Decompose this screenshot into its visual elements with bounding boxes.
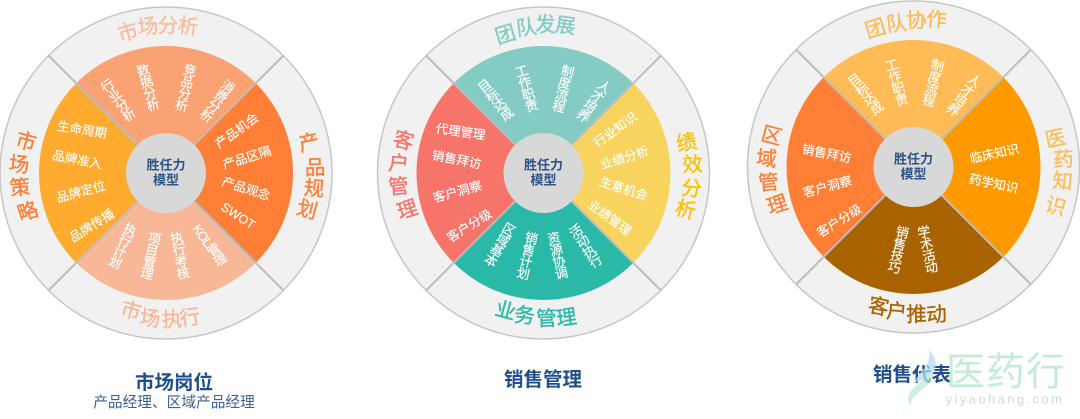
center disc: 胜任力模型: 模型 bbox=[900, 166, 927, 182]
title: 市场策略: 略 bbox=[15, 198, 42, 226]
panel: 医药知识 wedge: 药学知识 bbox=[968, 171, 1020, 196]
title: 业务管理: 务 bbox=[513, 303, 536, 329]
title: 区域管理 bbox=[755, 122, 791, 219]
title: 医药知识 bbox=[1042, 126, 1074, 221]
panel: 区域管理 wedge: 客户分级 bbox=[814, 201, 865, 240]
wheel: 市场岗位 bbox=[0, 7, 332, 339]
panel: 客户推动 wedge bbox=[824, 167, 1003, 294]
panel: 业务管理 wedge bbox=[454, 173, 633, 300]
caption: 销售代表: 销售代表 bbox=[873, 364, 951, 386]
title: 团队发展: 展 bbox=[554, 13, 577, 39]
center disc: 胜任力模型: 模型 bbox=[153, 172, 179, 188]
panel: 市场执行 wedge: 执行考核 bbox=[167, 230, 191, 281]
title: 客户管理: 理 bbox=[394, 196, 421, 224]
title: 团队协作 bbox=[862, 8, 948, 43]
center disc: 胜任力模型 bbox=[874, 127, 954, 207]
wheel: 销售代表 bbox=[748, 1, 1080, 333]
panel: 团队协作 wedge: 工作职责 bbox=[882, 57, 910, 109]
panel: 团队协作 wedge: 人才培养 bbox=[942, 70, 984, 120]
title: 产品规划: 划 bbox=[294, 196, 320, 224]
title: 产品规划: 规 bbox=[303, 177, 325, 201]
center disc: 胜任力模型: 胜任力 bbox=[524, 158, 563, 172]
panel: 医药知识 wedge bbox=[914, 77, 1040, 257]
title: 团队协作: 协 bbox=[906, 9, 927, 33]
title: 团队协作: 作 bbox=[925, 8, 948, 32]
center disc: 胜任力模型 bbox=[126, 133, 206, 213]
title: 产品规划 bbox=[294, 130, 326, 224]
watermark: 医药行 logo bbox=[908, 350, 1066, 406]
title: 客户推动: 户 bbox=[885, 300, 908, 324]
title: 区域管理: 区 bbox=[759, 122, 784, 150]
panel: 市场执行 wedge: 执行计划 bbox=[104, 220, 139, 271]
title: 医药知识: 医 bbox=[1043, 126, 1068, 152]
title: 团队发展: 队 bbox=[515, 15, 538, 41]
panel: 市场执行 wedge bbox=[76, 173, 256, 300]
title: 市场分析 bbox=[115, 14, 200, 47]
panel: 团队协作 wedge bbox=[824, 40, 1003, 167]
title: 区域管理: 域 bbox=[755, 147, 778, 171]
panel: 市场策略 wedge: 品牌定位 bbox=[55, 178, 107, 205]
panel: 绩效分析 wedge: 行业知识 bbox=[591, 110, 640, 150]
title: 客户管理: 客 bbox=[391, 127, 416, 155]
title: 市场执行: 执 bbox=[161, 308, 183, 332]
title: 团队协作: 队 bbox=[885, 11, 908, 37]
panel: 医药知识 wedge: 临床知识 bbox=[969, 142, 1020, 166]
watermark url: yiyaohang.com bbox=[946, 392, 1064, 406]
center disc: 胜任力模型: 胜任力 bbox=[146, 158, 186, 172]
title: 市场分析: 析 bbox=[176, 14, 200, 40]
title: 业务管理: 业 bbox=[493, 297, 518, 325]
panel: 客户管理 wedge: 代理管理 bbox=[435, 121, 487, 142]
panel: 绩效分析 wedge bbox=[544, 83, 670, 263]
panel: 市场策略 wedge: 品牌准入 bbox=[51, 147, 104, 172]
title: 市场策略: 场 bbox=[8, 153, 30, 177]
title: 团队发展 bbox=[492, 13, 577, 49]
panel: 团队发展 wedge: 目标达成 bbox=[474, 76, 517, 125]
title: 市场策略 bbox=[8, 128, 42, 226]
title: 区域管理: 管 bbox=[757, 171, 780, 195]
title: 市场分析: 分 bbox=[158, 14, 178, 38]
panel: 产品规划 wedge: 产品机会 bbox=[213, 110, 262, 151]
center disc: 胜任力模型: 胜任力 bbox=[894, 152, 933, 166]
title: 团队发展: 团 bbox=[492, 21, 519, 49]
panel: 产品规划 wedge: 产品观念 bbox=[220, 174, 273, 204]
title: 绩效分析: 效 bbox=[682, 153, 703, 177]
panel: 产品规划 wedge bbox=[166, 83, 293, 263]
panel: 客户管理 wedge: 客户分级 bbox=[444, 206, 495, 245]
panel: 绩效分析 wedge: 业绩分析 bbox=[599, 144, 650, 172]
panel: 客户管理 wedge bbox=[417, 83, 544, 263]
title: 医药知识: 知 bbox=[1051, 169, 1074, 195]
panel: 客户管理 wedge: 客户洞察 bbox=[431, 178, 484, 205]
title: 客户推动 bbox=[866, 294, 948, 327]
title: 产品规划: 产 bbox=[297, 130, 321, 156]
title: 医药知识: 识 bbox=[1042, 193, 1069, 221]
panel: 市场策略 wedge: 品牌传播 bbox=[67, 206, 117, 245]
title: 业务管理 bbox=[493, 297, 578, 331]
title: 绩效分析: 析 bbox=[673, 196, 698, 224]
panel: 区域管理 wedge bbox=[787, 77, 914, 257]
title: 绩效分析: 分 bbox=[680, 176, 703, 202]
watermark text: 医药行 bbox=[946, 352, 1066, 394]
title: 市场执行: 场 bbox=[139, 306, 161, 332]
panel: 市场执行 wedge: KOL管理 bbox=[189, 221, 229, 269]
caption subtitle: 产品经理、区域产品经理: 产品经理、区域产品经理 bbox=[93, 394, 255, 411]
panel: 市场策略 wedge bbox=[39, 83, 166, 263]
panel: 团队发展 wedge bbox=[454, 46, 633, 173]
title: 客户管理: 户 bbox=[387, 152, 410, 176]
title: 区域管理: 理 bbox=[764, 191, 791, 219]
panel: 客户管理 wedge: 销售拜访 bbox=[431, 147, 483, 172]
panel: 业务管理 wedge: 资源协调 bbox=[544, 230, 569, 281]
panel: 团队发展 wedge: 人才培养 bbox=[572, 76, 614, 126]
title: 客户管理 bbox=[387, 127, 421, 224]
title: 医药知识: 药 bbox=[1053, 148, 1074, 172]
caption: 销售管理: 销售管理 bbox=[504, 368, 582, 391]
panel: 区域管理 wedge: 客户洞察 bbox=[801, 173, 854, 200]
panel: 市场分析 wedge: 消费分析 bbox=[196, 76, 237, 125]
title: 团队协作: 团 bbox=[862, 15, 889, 43]
panel: 绩效分析 wedge: 生意机会 bbox=[598, 174, 650, 204]
center disc: 胜任力模型 bbox=[504, 133, 584, 213]
title: 市场执行: 行 bbox=[178, 305, 202, 331]
title: 客户推动: 推 bbox=[906, 303, 927, 327]
panel: 市场分析 wedge: 竞品分析 bbox=[172, 61, 198, 113]
center disc: 胜任力模型: 模型 bbox=[530, 172, 557, 188]
panel: 市场分析 wedge bbox=[76, 46, 256, 173]
panel: 业务管理 wedge: 区域基本 bbox=[480, 219, 518, 270]
panel: 区域管理 wedge: 销售拜访 bbox=[801, 141, 853, 166]
title: 市场策略: 市 bbox=[13, 128, 39, 156]
title: 产品规划: 品 bbox=[304, 156, 326, 180]
panel: 团队协作 wedge: 制度流程 bbox=[919, 57, 946, 109]
panel: 客户推动 wedge: 学术活动 bbox=[914, 223, 939, 276]
title: 绩效分析 bbox=[673, 130, 703, 224]
panel: 市场策略 wedge: 生命周期 bbox=[56, 118, 108, 141]
panel: 团队发展 wedge: 制度流程 bbox=[549, 63, 576, 115]
panel: 业务管理 wedge: 销售计划 bbox=[513, 230, 539, 281]
panel: 业务管理 wedge: 活动执行 bbox=[565, 222, 605, 272]
panel: 产品规划 wedge: 产品区隔 bbox=[221, 144, 273, 172]
title: 绩效分析: 绩 bbox=[674, 130, 699, 156]
title: 市场执行: 市 bbox=[118, 297, 144, 325]
title: 客户推动: 动 bbox=[925, 303, 948, 327]
wheel: 销售管理 bbox=[378, 7, 710, 339]
title: 团队发展: 发 bbox=[535, 14, 556, 36]
panel: 团队发展 wedge: 工作职责 bbox=[512, 63, 540, 115]
title: 市场分析: 市 bbox=[115, 19, 141, 47]
caption: 市场岗位: 市场岗位 bbox=[135, 371, 213, 394]
title: 客户管理: 管 bbox=[387, 175, 410, 199]
panel: 市场分析 wedge: 行业分析 bbox=[97, 76, 138, 125]
title: 客户推动: 客 bbox=[866, 294, 891, 320]
panel: 产品规划 wedge: SWOT bbox=[218, 200, 258, 232]
title: 业务管理: 理 bbox=[555, 305, 578, 331]
panel: 团队协作 wedge: 目标达成 bbox=[844, 70, 887, 119]
title: 市场执行 bbox=[118, 297, 202, 332]
panel: 绩效分析 wedge: 业绩管理 bbox=[585, 197, 635, 239]
title: 业务管理: 管 bbox=[536, 307, 557, 331]
panel: 客户推动 wedge: 销售技巧 bbox=[884, 224, 910, 275]
title: 市场分析: 场 bbox=[136, 14, 160, 40]
panel: 市场执行 wedge: 项目管理 bbox=[138, 230, 162, 280]
panel: 市场分析 wedge: 数据分析 bbox=[133, 62, 161, 114]
title: 市场策略: 策 bbox=[9, 176, 31, 200]
icon: flame logo bbox=[908, 350, 936, 405]
